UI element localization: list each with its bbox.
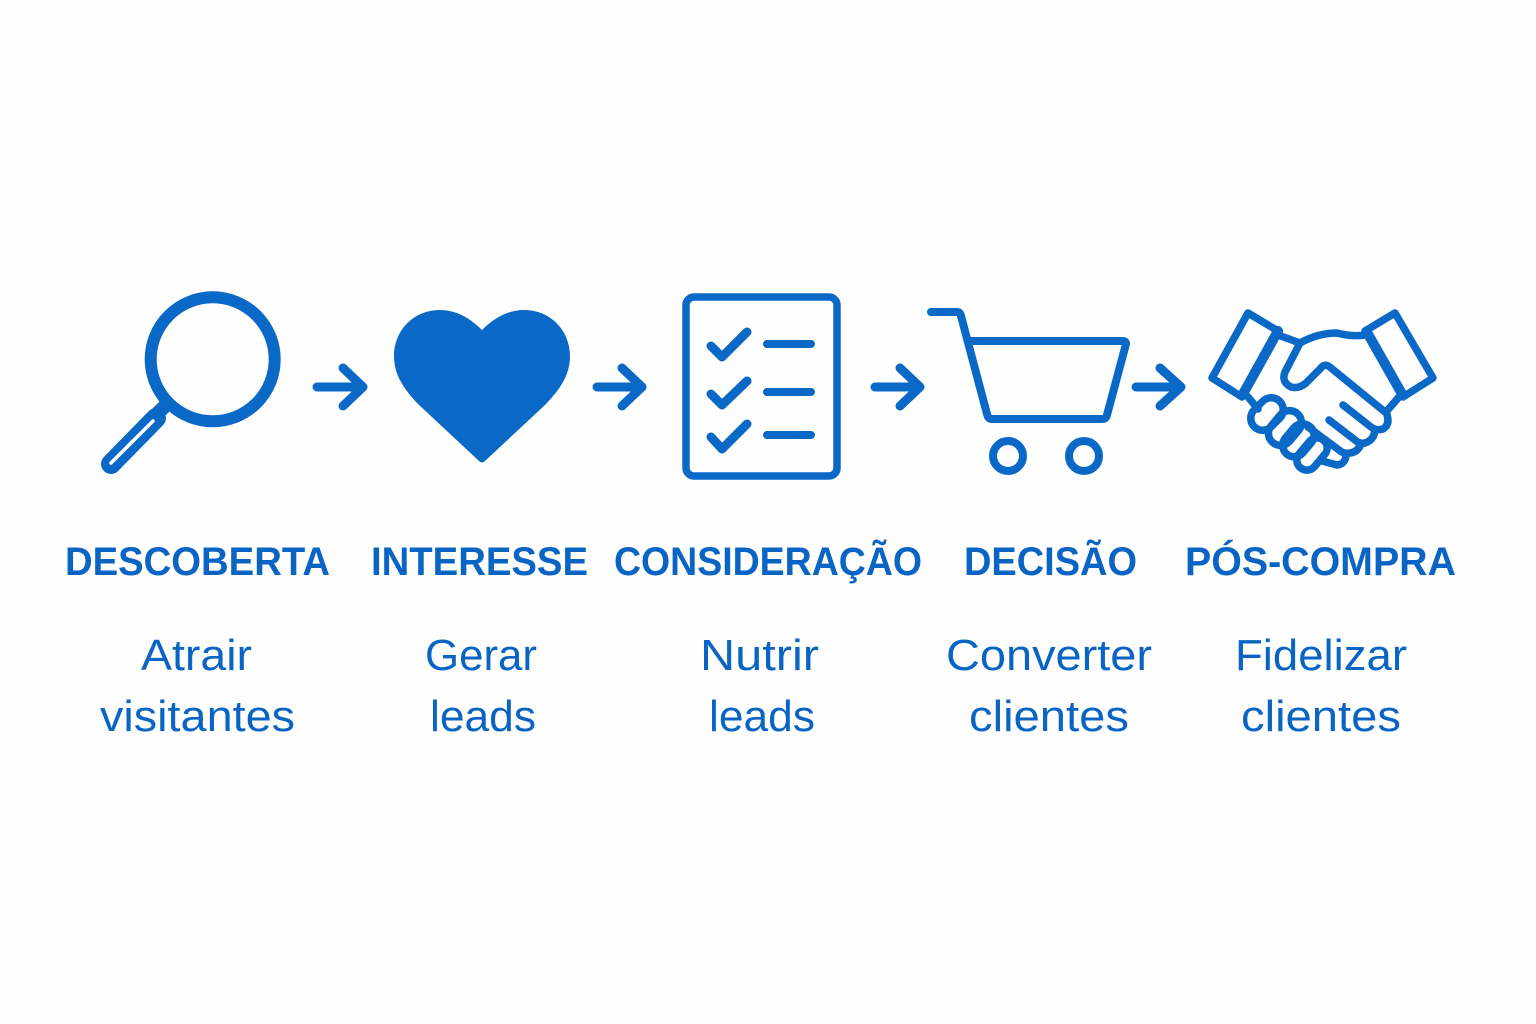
description: Atrair visitantes: visitantes [100, 692, 295, 741]
heading: CONSIDERAÇÃO: CONSIDERAÇÃO [614, 538, 922, 584]
step: Consideração [614, 297, 922, 741]
icon: checklist [686, 297, 837, 476]
arrow 4 [1136, 368, 1181, 406]
description: Gerar leads [425, 631, 537, 741]
description: Atrair visitantes: Atrair [141, 631, 252, 680]
step: Interesse [371, 310, 588, 741]
description: Fidelizar clientes: Fidelizar [1235, 631, 1407, 680]
description: Converter clientes [946, 631, 1152, 741]
arrow 2 [597, 368, 642, 406]
arrow 1 [317, 368, 363, 406]
description: Atrair visitantes [100, 631, 295, 741]
description: Fidelizar clientes: clientes [1241, 692, 1401, 741]
step: Pós-compra [1185, 313, 1456, 741]
heading: INTERESSE: INTERESSE [371, 540, 588, 584]
step: Decisão [931, 312, 1152, 741]
description: Converter clientes: Converter [946, 631, 1152, 680]
description: Nutrir leads: leads [709, 692, 815, 741]
description: Fidelizar clientes [1235, 631, 1407, 741]
heading: PÓS-COMPRA: PÓS-COMPRA [1185, 538, 1456, 584]
arrow 3 [875, 368, 920, 406]
description: Nutrir leads [700, 631, 819, 741]
icon: magnifying glass [111, 297, 275, 464]
description: Converter clientes: clientes [969, 692, 1129, 741]
heading: DECISÃO: DECISÃO [964, 538, 1137, 584]
heading: DESCOBERTA: DESCOBERTA [65, 540, 330, 584]
icon: shopping cart [931, 312, 1126, 471]
description: Gerar leads: Gerar [425, 631, 537, 680]
description: Gerar leads: leads [430, 692, 536, 741]
step: Descoberta [65, 297, 330, 741]
description: Nutrir leads: Nutrir [700, 631, 819, 680]
icon: handshake [1212, 313, 1433, 474]
icon: heart [394, 310, 570, 462]
